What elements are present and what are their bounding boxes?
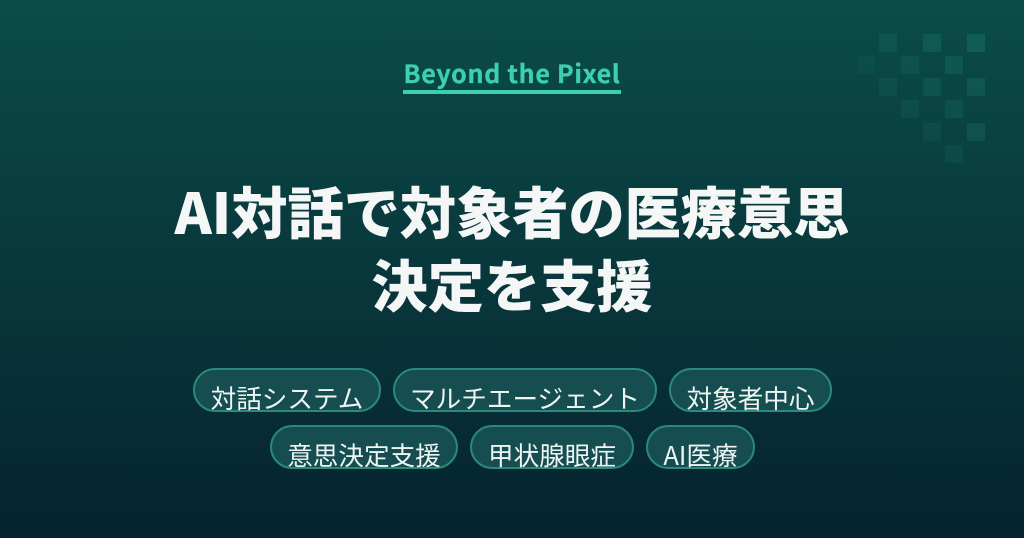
decorative square pattern (879, 34, 985, 163)
title: AI対話で対象者の医療意思 (175, 170, 849, 251)
tag: 甲状腺眼症 (470, 425, 634, 469)
tag: 意思決定支援: 意思決定支援 (287, 436, 441, 473)
brand label: Beyond the Pixel: Beyond the Pixel (403, 55, 620, 91)
title: 決定を支援 (372, 243, 652, 324)
tag: マルチエージェント (393, 368, 657, 412)
title (174, 170, 849, 324)
tag: 意思決定支援 (270, 425, 458, 469)
tag: 対象者中心: 対象者中心 (686, 379, 814, 416)
tag: 対話システム: 対話システム (211, 379, 363, 416)
tag: AI医療 (646, 425, 755, 469)
tag: AI医療: AI医療 (663, 436, 738, 473)
tag: マルチエージェント: マルチエージェント (410, 379, 640, 416)
tag: 甲状腺眼症: 甲状腺眼症 (488, 436, 616, 473)
tag: 対話システム (193, 368, 381, 412)
tag: 対象者中心 (669, 368, 832, 412)
